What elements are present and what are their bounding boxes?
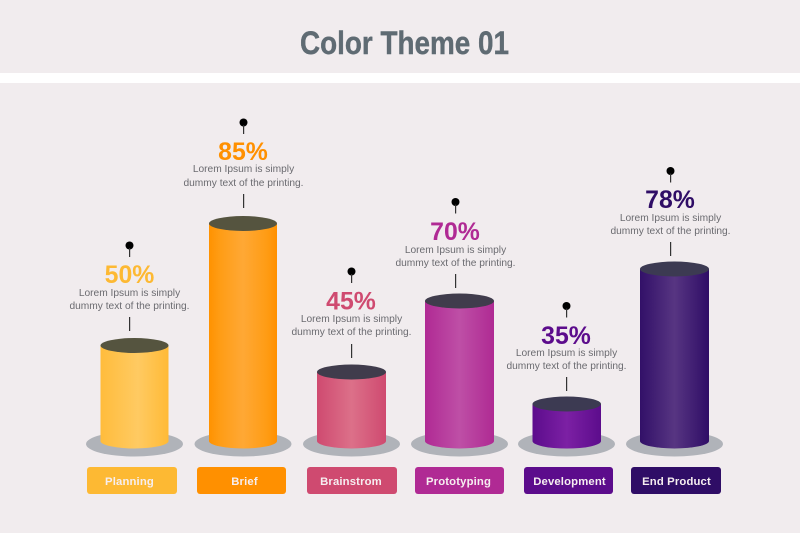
cylinder xyxy=(194,216,292,456)
percentage: 45% xyxy=(326,288,376,316)
percentage: 50% xyxy=(105,262,154,289)
label: Prototyping xyxy=(426,476,491,488)
cylinder xyxy=(518,396,615,456)
pin marker xyxy=(348,268,356,283)
pin marker xyxy=(126,242,134,257)
column: Brief 85% xyxy=(183,118,304,494)
label: Planning xyxy=(105,476,154,488)
connector line xyxy=(566,377,567,391)
description: dummy text of the printing. xyxy=(291,327,412,338)
pin marker xyxy=(666,167,674,182)
cylinder xyxy=(86,338,183,456)
percentage: 78% xyxy=(645,187,695,214)
percentage: 70% xyxy=(430,219,480,246)
description: dummy text of the printing. xyxy=(183,178,304,189)
label: Brainstrom xyxy=(320,476,382,488)
description: dummy text of the printing. xyxy=(69,301,190,312)
label: Brief xyxy=(231,476,258,488)
label: End Product xyxy=(642,476,711,488)
description: dummy text of the printing. xyxy=(395,258,516,269)
title: Color Theme 01 xyxy=(300,25,509,61)
label xyxy=(631,467,721,494)
column: Planning 50% xyxy=(69,242,190,494)
description: Lorem Ipsum is simply xyxy=(405,245,507,256)
column: End Product 78% xyxy=(610,167,731,494)
label xyxy=(197,467,286,494)
description: Lorem Ipsum is simply xyxy=(79,288,181,299)
label xyxy=(415,467,504,494)
cylinder xyxy=(411,294,508,456)
connector line xyxy=(351,344,352,358)
percentage: 85% xyxy=(218,139,268,166)
connector line xyxy=(455,274,456,288)
description: dummy text of the printing. xyxy=(506,361,627,372)
pin marker xyxy=(452,198,460,214)
connector line xyxy=(670,242,671,256)
cylinder xyxy=(626,262,723,456)
pin marker xyxy=(240,118,248,134)
description: Lorem Ipsum is simply xyxy=(620,213,722,224)
label xyxy=(524,467,613,494)
description: Lorem Ipsum is simply xyxy=(516,348,618,359)
description: Lorem Ipsum is simply xyxy=(193,164,295,175)
column: Development 35% xyxy=(506,302,627,494)
percentage: 35% xyxy=(541,323,591,350)
connector line xyxy=(243,194,244,208)
label xyxy=(87,467,177,494)
column: Prototyping 70% xyxy=(395,198,516,494)
description: dummy text of the printing. xyxy=(610,226,731,237)
cylinder xyxy=(303,364,400,456)
connector line xyxy=(129,317,130,331)
white divider band xyxy=(0,73,800,83)
label xyxy=(307,467,397,494)
column: Brainstrom 45% xyxy=(291,268,412,494)
pin marker xyxy=(562,302,570,318)
label: Development xyxy=(533,476,606,488)
description: Lorem Ipsum is simply xyxy=(301,314,403,325)
